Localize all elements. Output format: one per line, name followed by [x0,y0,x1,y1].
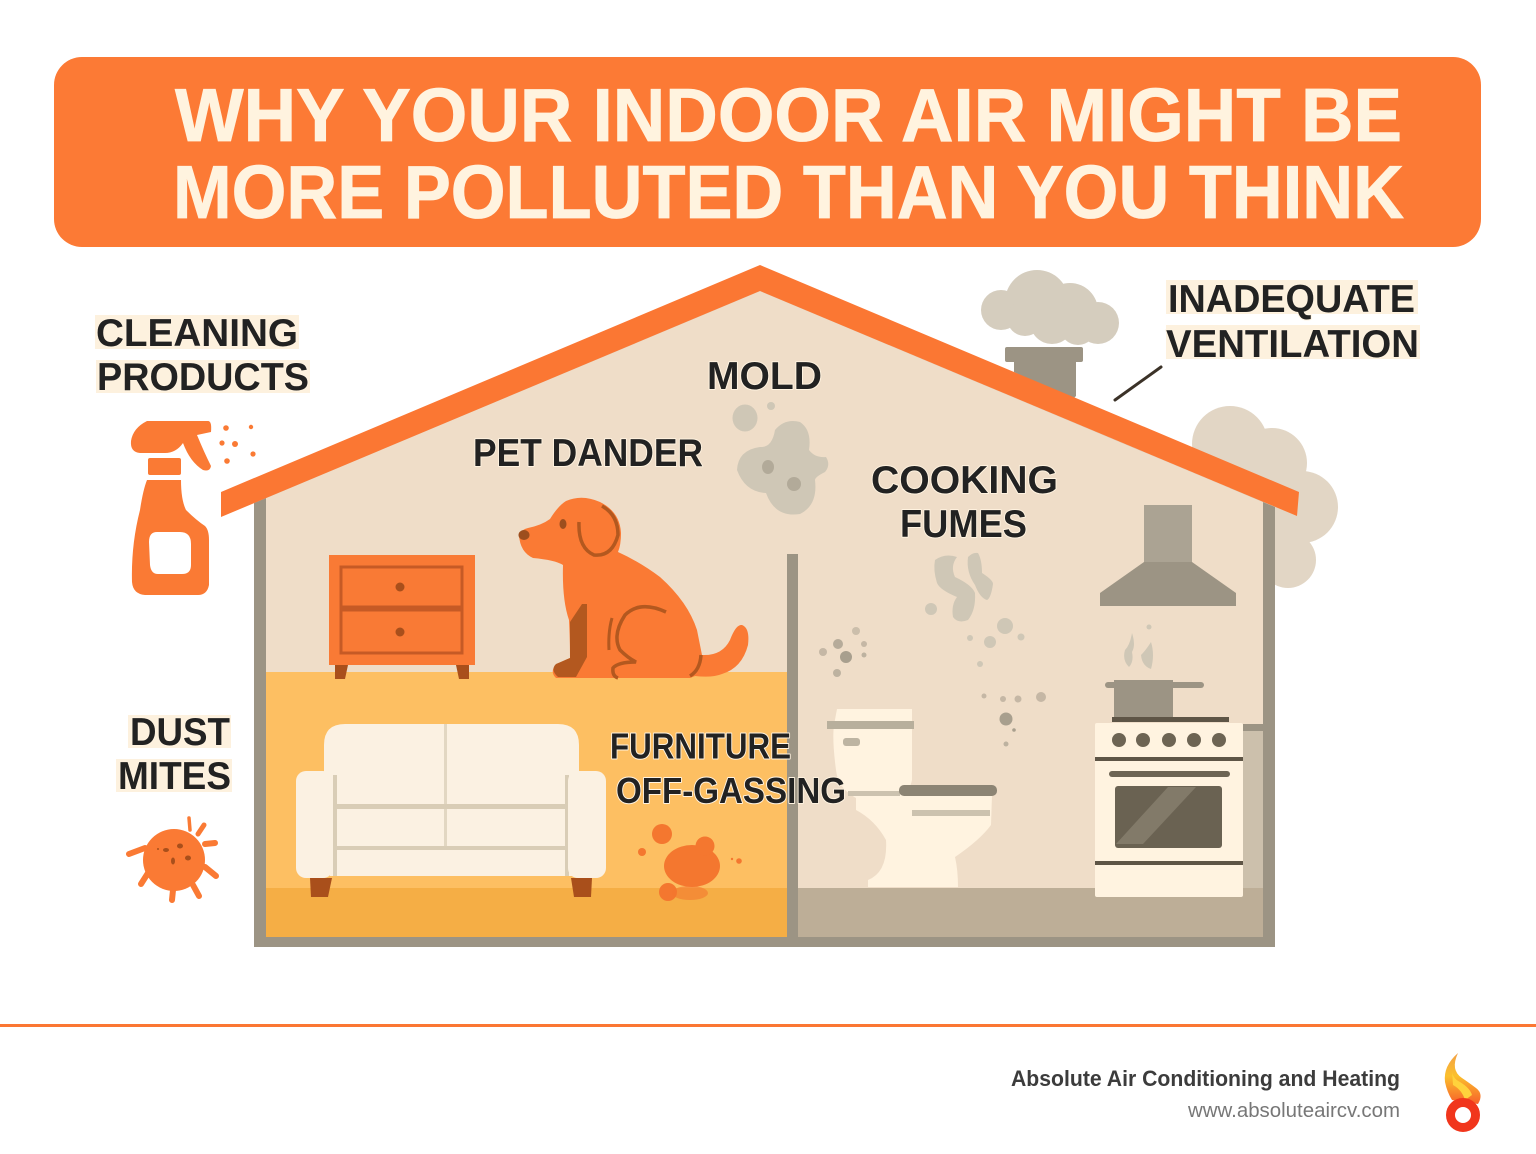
icon: steam [1124,624,1153,669]
icon: off-gassing stain [638,824,742,901]
icon: toilet [827,709,997,887]
label: dust mites [116,711,232,798]
icon: mold [732,402,828,515]
icon: cooking fumes swirls [925,553,1024,667]
label: furniture off-gassing: FURNITURE [610,726,791,766]
title [173,73,1404,234]
icon: dust particles [819,627,1046,746]
title: WHY YOUR INDOOR AIR MIGHT BE [175,73,1402,157]
label: mold: MOLD [707,355,822,398]
icon: chimney smoke cloud [981,270,1119,345]
label: cooking fumes [871,459,1058,546]
roof [221,265,1299,517]
wall trim beside stove [1243,724,1263,888]
label: inadequate ventilation [1166,278,1420,366]
icon: sofa [296,724,606,897]
label: cleaning products [95,312,310,399]
label: dust mites: MITES [118,755,231,798]
label: furniture off-gassing [610,726,846,811]
title: MORE POLLUTED THAN YOU THINK [173,150,1404,234]
footer rule [0,1024,1536,1027]
house interior [266,291,1263,937]
icon: exterior smoke cloud [1192,406,1338,588]
label: furniture off-gassing: OFF-GASSING [616,770,846,811]
footer website: www.absoluteaircv.com [1187,1100,1400,1122]
icon: range hood [1100,505,1236,606]
icon: dresser [329,555,475,679]
label: dust mites: DUST [130,711,230,754]
icon: spray bottle [131,421,256,595]
pointer line: ventilation [1115,367,1161,400]
label: cooking fumes: COOKING [871,459,1058,502]
icon: stove [1095,680,1243,897]
house [221,265,1299,947]
label: pet dander: PET DANDER [473,432,703,475]
pot [1105,680,1204,718]
footer company name: Absolute Air Conditioning and Heating [1011,1066,1400,1091]
icon: dust mite [129,818,216,900]
label: inadequate ventilation: VENTILATION [1166,323,1419,366]
label: cooking fumes: FUMES [900,503,1027,546]
panel: living room floor [266,672,787,937]
panel: kitchen floor [798,888,1263,937]
spray droplets [219,425,256,464]
icon: chimney [1005,347,1083,400]
label: cleaning products: CLEANING [96,312,298,355]
house walls [254,291,1275,947]
icon: dog [518,498,748,678]
title banner [54,57,1481,247]
label: inadequate ventilation: INADEQUATE [1168,278,1415,321]
icon: flame logo [1445,1053,1481,1128]
label: cleaning products: PRODUCTS [97,356,309,399]
divider wall [787,554,798,937]
